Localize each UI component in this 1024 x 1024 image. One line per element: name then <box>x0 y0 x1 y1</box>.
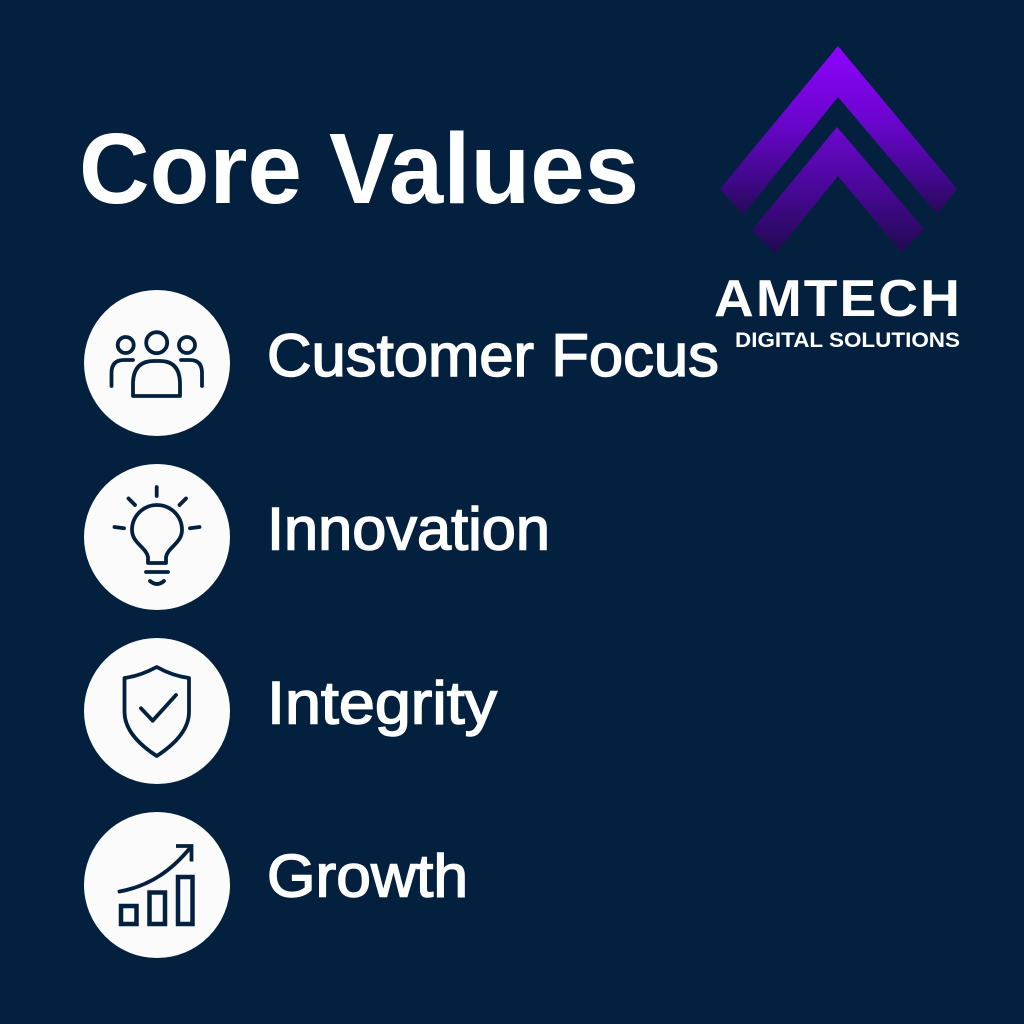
label: Growth: Growth <box>267 842 468 910</box>
label: Innovation: Innovation <box>267 496 550 562</box>
icon: shield with check <box>124 667 189 756</box>
logo wordmark: AMTECH <box>714 269 960 328</box>
title: Core Values <box>79 113 639 225</box>
value row: Growth <box>84 812 468 958</box>
icon: people group <box>112 332 202 396</box>
icon circle: growth <box>84 812 230 958</box>
logo tagline: DIGITAL SOLUTIONS <box>735 328 960 352</box>
value row: Innovation <box>84 464 550 610</box>
value row: Integrity <box>84 638 497 784</box>
value row: Customer Focus <box>84 290 719 436</box>
icon: light bulb <box>114 487 200 584</box>
icon circle: customer focus <box>84 290 230 436</box>
logo mark: upper chevron <box>720 46 957 215</box>
icon: rising bar chart with arrow <box>120 846 192 924</box>
logo mark: lower chevron <box>752 127 924 254</box>
label: Customer Focus: Customer Focus <box>267 322 719 389</box>
icon circle: integrity <box>84 638 230 784</box>
logo: Amtech Digital Solutions <box>714 46 960 352</box>
label: Integrity: Integrity <box>267 670 497 736</box>
icon circle: innovation <box>84 464 230 610</box>
